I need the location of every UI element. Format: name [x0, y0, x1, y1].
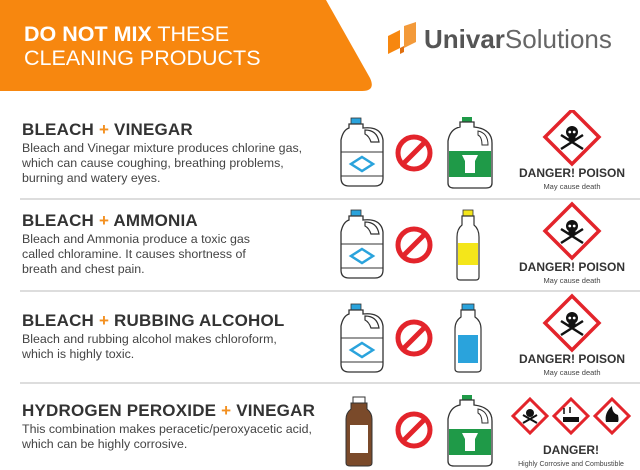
icons row 1: May cause death [543, 182, 601, 191]
text: hydrogen peroxide vinegar [22, 422, 312, 451]
heading: bleach vinegar: BLEACH + VINEGAR [22, 120, 193, 139]
heading: bleach rubbing alcohol: BLEACH + RUBBING ALCOHOL [22, 311, 285, 330]
icons row 4: DANGER! [543, 443, 599, 457]
title: CLEANING PRODUCTS [24, 46, 261, 70]
icons row 1: DANGER! POISON [519, 166, 625, 180]
icons row 3 [340, 294, 625, 377]
icons row 3: May cause death [543, 368, 601, 377]
text: bleach ammonia: called chloramine. It causes shortness of [22, 247, 246, 261]
title [24, 22, 261, 70]
icons row 2: May cause death [543, 276, 601, 285]
icons row 2: DANGER! POISON [519, 260, 625, 274]
text: bleach rubbing alcohol: which is highly toxic. [22, 347, 134, 361]
logo: UnivarSolutions [424, 24, 612, 54]
heading: hydrogen peroxide vinegar: HYDROGEN PEROXIDE + VINEGAR [22, 401, 315, 420]
icons row 4 [346, 395, 631, 468]
text: hydrogen peroxide vinegar: This combination makes peracetic/peroxyacetic acid, [22, 422, 312, 436]
text: hydrogen peroxide vinegar: which can be highly corrosive. [22, 437, 187, 451]
text: bleach ammonia [22, 232, 250, 276]
heading: bleach ammonia: BLEACH + AMMONIA [22, 211, 198, 230]
text: bleach vinegar: which can cause coughing, breathing problems, [22, 156, 284, 170]
row 3 [22, 294, 625, 377]
text: bleach rubbing alcohol: Bleach and rubbing alcohol makes chloroform, [22, 332, 277, 346]
row 4 [22, 395, 631, 468]
text: bleach ammonia: breath and chest pain. [22, 262, 145, 276]
icons row 3: DANGER! POISON [519, 352, 625, 366]
row 2 [22, 202, 625, 285]
text: bleach vinegar: Bleach and Vinegar mixture produces chlorine gas, [22, 141, 302, 155]
title: DO NOT MIX THESE [24, 22, 229, 46]
icons row 1 [340, 110, 625, 191]
text: bleach vinegar [22, 141, 302, 185]
text: bleach rubbing alcohol [22, 332, 277, 361]
row 1 [22, 110, 625, 191]
text: bleach vinegar: burning and watery eyes. [22, 171, 160, 185]
header banner [0, 0, 372, 91]
icons row 2 [340, 202, 625, 285]
text: bleach ammonia: Bleach and Ammonia produce a toxic gas [22, 232, 250, 246]
icons row 4: Highly Corrosive and Combustible [518, 461, 624, 468]
